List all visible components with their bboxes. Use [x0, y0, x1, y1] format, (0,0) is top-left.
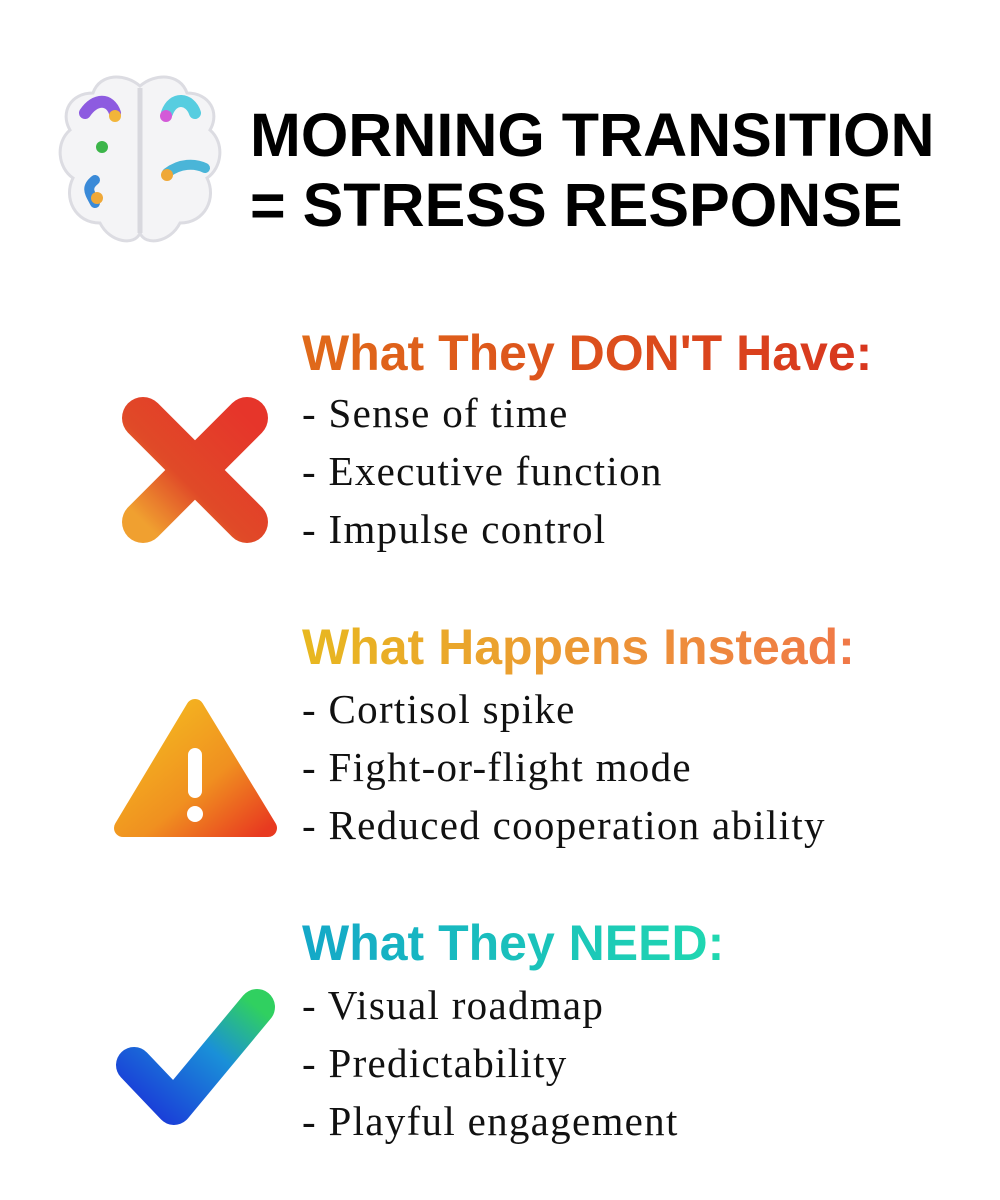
list: happens instead: - Cortisol spike	[302, 686, 576, 732]
list: don't have	[302, 390, 663, 552]
icon: warning triangle	[114, 699, 277, 837]
list: need: - Visual roadmap	[302, 982, 604, 1028]
list: don't have: - Sense of time	[302, 390, 569, 436]
heading: need: What They NEED:	[302, 915, 724, 971]
list: need: - Predictability	[302, 1040, 568, 1086]
icon: check mark	[116, 989, 275, 1125]
title	[250, 101, 935, 239]
heading: don't have: What They DON'T Have:	[302, 325, 872, 381]
icon: red X	[122, 397, 268, 543]
list: happens instead	[302, 686, 826, 848]
list: need	[302, 982, 679, 1144]
title: = STRESS RESPONSE	[250, 171, 903, 239]
icon: brain	[58, 76, 222, 242]
list: don't have: - Impulse control	[302, 506, 606, 552]
title: MORNING TRANSITION	[250, 101, 935, 169]
list: need: - Playful engagement	[302, 1098, 679, 1144]
list: happens instead: - Fight-or-flight mode	[302, 744, 692, 790]
list: don't have: - Executive function	[302, 448, 663, 494]
heading: happens instead: What Happens Instead:	[302, 619, 855, 675]
list: happens instead: - Reduced cooperation ability	[302, 802, 826, 848]
